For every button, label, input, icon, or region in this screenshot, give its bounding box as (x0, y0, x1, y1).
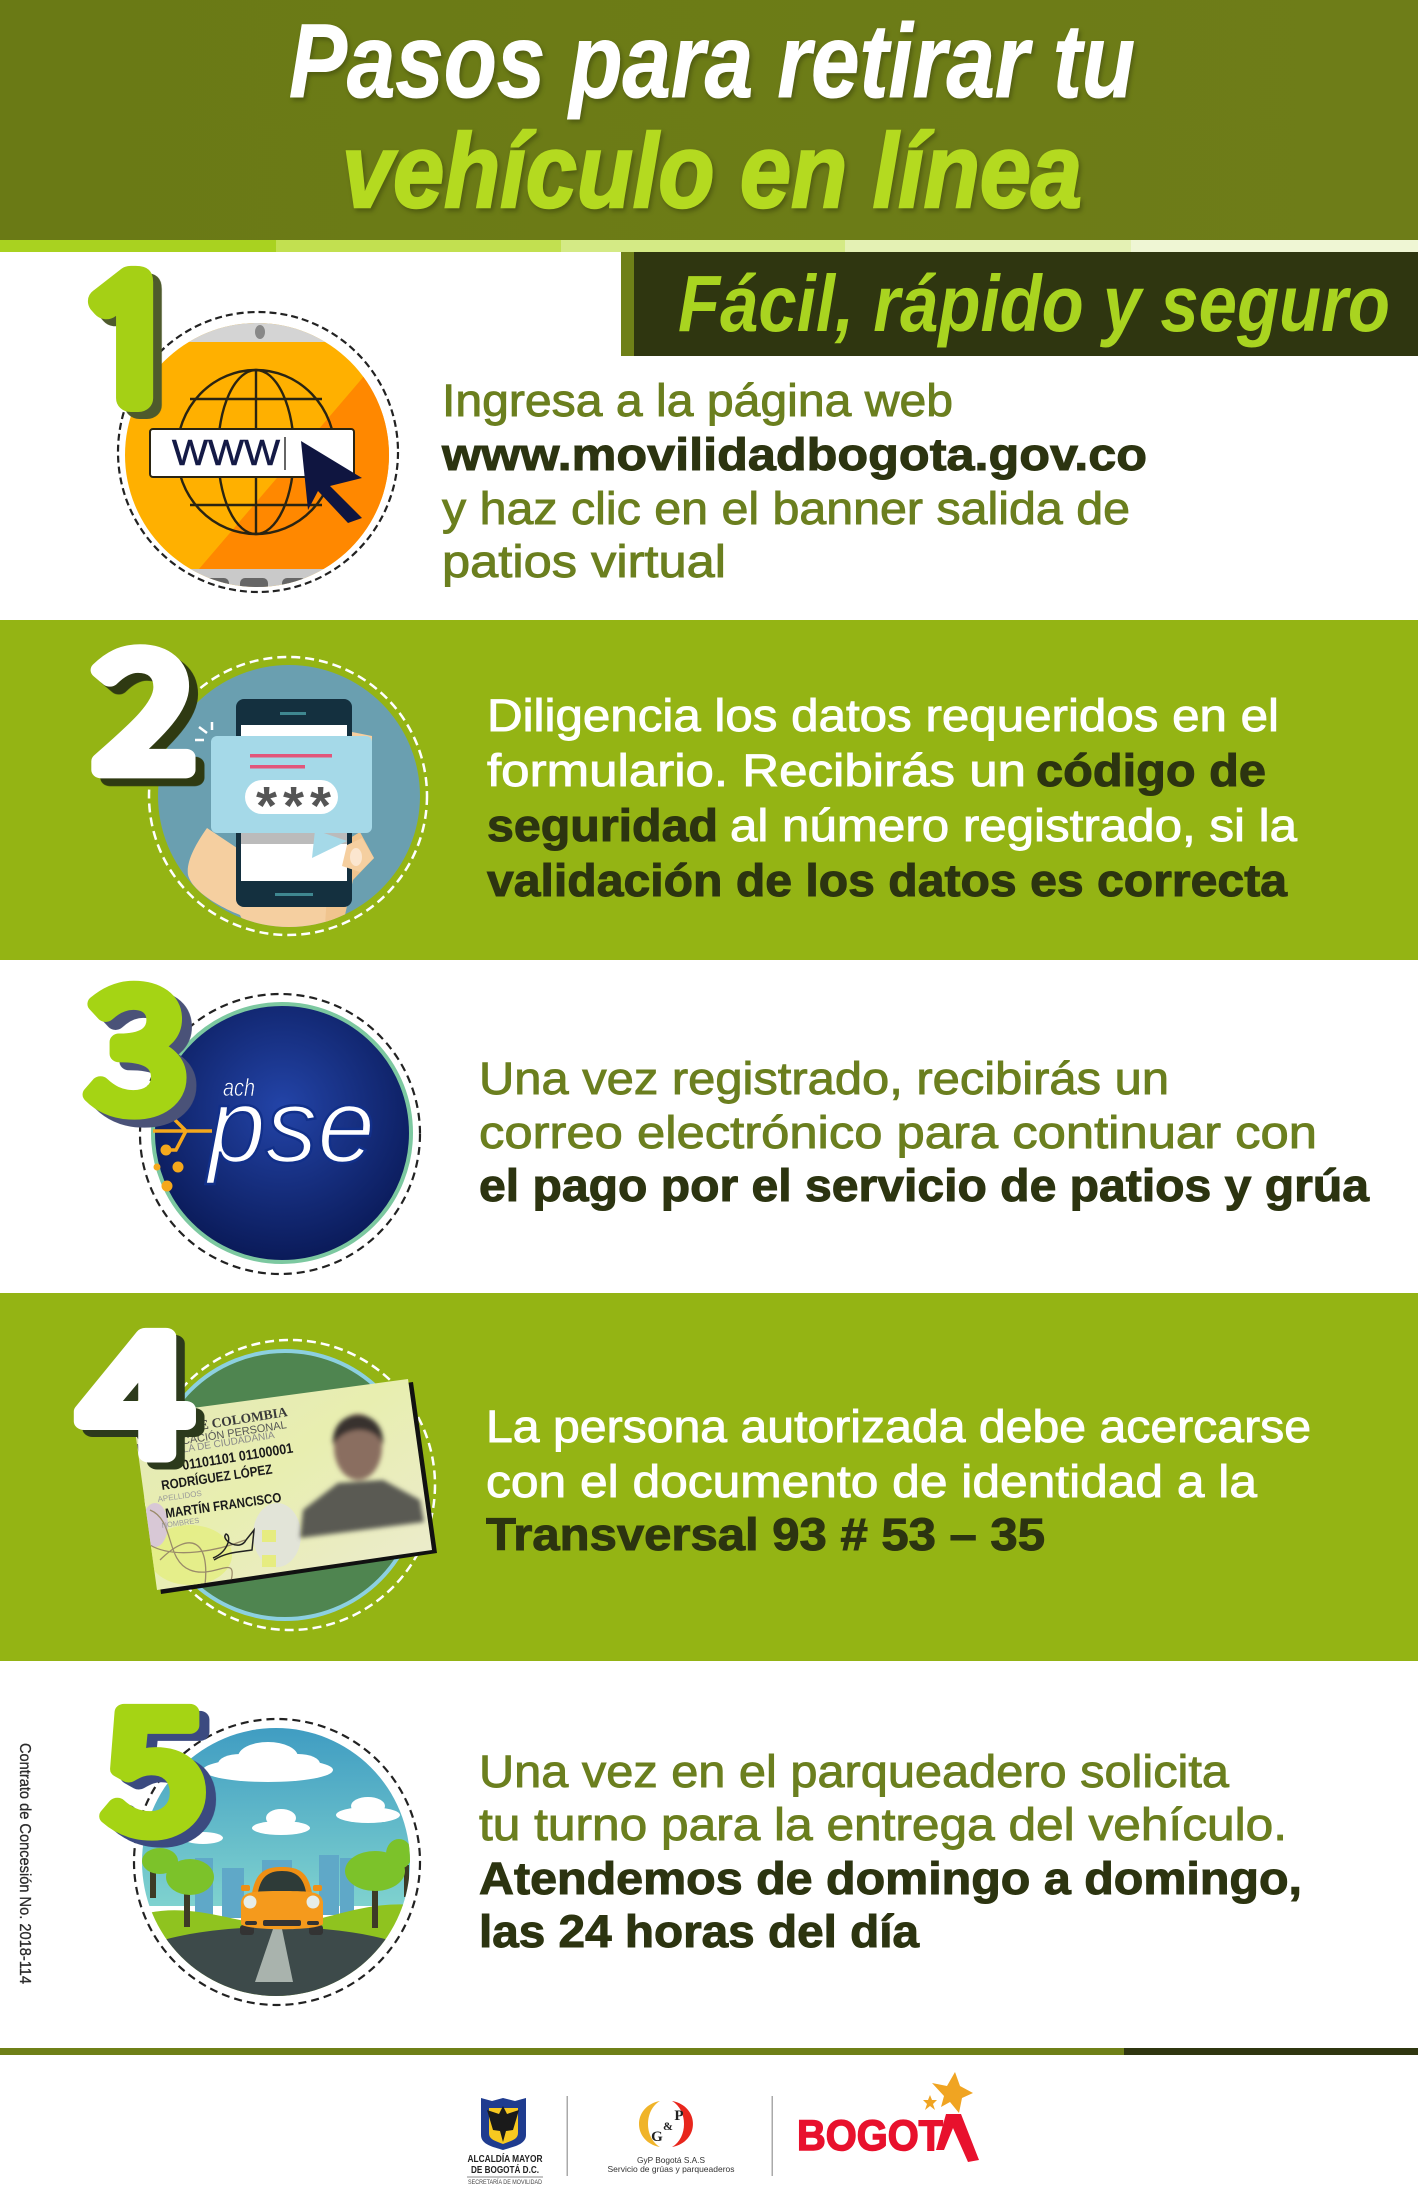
text: step 1: patios virtual (442, 536, 726, 587)
number 5: 5 (104, 1640, 206, 1878)
title: Pasos para retirar tu (289, 3, 1135, 120)
text: step 2: validación de los datos es correcta (487, 855, 1288, 906)
text: step 4: La persona autorizada debe acercarse (486, 1401, 1311, 1452)
text: step 2: código de (1036, 745, 1266, 796)
icon: identity card: 01101101 01100001 (181, 1440, 294, 1473)
number 3: 3 (87, 918, 187, 1157)
logo: Bogotá (797, 2072, 979, 2162)
number 2: 2 (93, 584, 195, 817)
panel: step 5 (99, 1704, 1300, 2006)
icon: phone with code bubble (149, 657, 427, 935)
logo: GyP Bogotá: Servicio de grúas y parqueaderos (608, 2164, 734, 2174)
panel: step 4 (0, 1264, 1418, 1661)
text: step 1: www.movilidadbogota.gov.co (441, 429, 1147, 480)
icon: identity card: NOMBRES (161, 1516, 200, 1530)
logo: Alcaldía Mayor: DE BOGOTÁ D.C. (471, 2163, 539, 2176)
text: step 3: el pago por el servicio de patios y grúa (479, 1160, 1370, 1211)
text: step 3: correo electrónico para continuar con (479, 1107, 1317, 1158)
icon: web browser globe (118, 312, 400, 593)
text: step 2: seguridad (487, 800, 718, 851)
text: step 2: formulario. Recibirás un (487, 745, 1026, 796)
icon: PSE logo: ach (223, 1074, 255, 1102)
title: vehículo en línea (342, 113, 1082, 230)
text: step 2: Diligencia los datos requeridos en el (487, 690, 1279, 741)
text: step 3 (479, 1053, 1370, 1211)
logo: Alcaldía Mayor: SECRETARÍA DE MOVILIDAD (468, 2179, 543, 2186)
text: step 2: al número registrado, si la (730, 800, 1298, 851)
text: step 5: Una vez en el parqueadero solicita (479, 1746, 1230, 1797)
panel: step 3 (87, 918, 1370, 1274)
logo: GyP Bogotá: GyP Bogotá S.A.S (637, 2155, 705, 2165)
text: step 4: Transversal 93 # 53 – 35 (486, 1509, 1045, 1560)
text: step 5 (479, 1746, 1302, 1957)
title (289, 3, 1135, 230)
text: step 1: y haz clic en el banner salida de (442, 483, 1130, 534)
text: step 5: las 24 horas del día (479, 1906, 920, 1957)
logo: Bogotá: BOGOT (797, 2112, 943, 2160)
icon: web browser globe: WWW (172, 432, 280, 473)
icon: identity card: CÉDULA DE CIUDADANÍA (154, 1428, 276, 1460)
text: step 5: Atendemos de domingo a domingo, (479, 1853, 1302, 1904)
text: step 3: Una vez registrado, recibirás un (479, 1053, 1169, 1104)
logo: GyP Bogotá (608, 2101, 734, 2174)
logo: Alcaldía Mayor: ALCALDÍA MAYOR (468, 2152, 543, 2165)
panel: step 1 (75, 259, 1147, 593)
text: step 5: tu turno para la entrega del vehículo. (479, 1799, 1287, 1850)
icon: identity card: RODRÍGUEZ LÓPEZ (160, 1462, 273, 1493)
panel: step 2 (0, 584, 1418, 960)
text: step 4 (486, 1401, 1311, 1560)
header banner (0, 0, 1418, 252)
logo: GyP Bogotá: P (674, 2108, 684, 2124)
logo: GyP Bogotá: & (663, 2119, 673, 2133)
logo: GyP Bogotá: G (651, 2129, 663, 2145)
logo: Alcaldía Mayor (467, 2098, 543, 2186)
contract note: Contrato de Concesión No. 2018-114 (16, 1743, 33, 1984)
footer logos (467, 2072, 979, 2186)
number 1: 1 (75, 259, 183, 424)
icon: PSE logo: pse (205, 1067, 375, 1185)
icon: identity card: MARTÍN FRANCISCO (164, 1490, 282, 1521)
icon: identity card: APELLIDOS (157, 1489, 202, 1504)
icon: identity card (108, 1340, 437, 1630)
icon: phone with code bubble: *** (256, 776, 331, 836)
text: step 1: Ingresa a la página web (442, 375, 953, 426)
icon: identity card: REPÚBLICA DE COLOMBIA (108, 1404, 289, 1447)
text: step 1 (441, 375, 1147, 587)
text: step 2 (487, 690, 1298, 906)
text: step 4: con el documento de identidad a la (486, 1456, 1258, 1507)
icon: PSE logo (140, 994, 420, 1274)
icon: car on road (132, 1718, 422, 2006)
icon: identity card: IDENTIFICACIÓN PERSONAL (136, 1418, 287, 1455)
footer rule (0, 2048, 1418, 2055)
number 4: 4 (80, 1264, 192, 1502)
